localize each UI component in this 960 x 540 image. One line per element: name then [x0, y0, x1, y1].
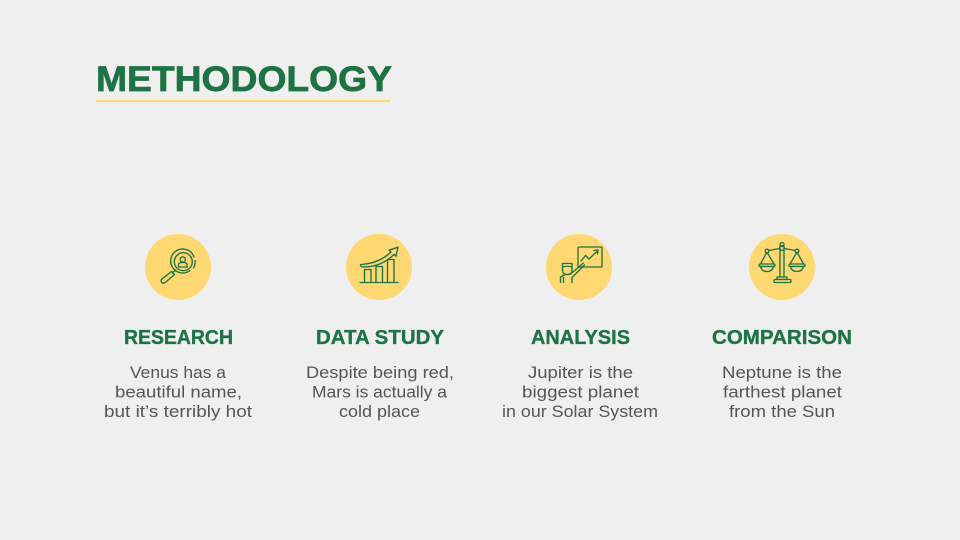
text: data study description: cold place — [339, 403, 420, 421]
panel: analysis — [502, 234, 658, 421]
text: data study description: Mars is actually a — [312, 384, 448, 402]
text: analysis description: in our Solar System — [502, 403, 658, 421]
text: research description: beautiful name, — [115, 384, 242, 402]
icon: magnifying glass with person — [145, 234, 211, 300]
panel: data study — [306, 234, 454, 421]
heading: analysis: ANALYSIS — [531, 327, 630, 349]
text: analysis description — [502, 364, 658, 421]
text: comparison description — [722, 364, 842, 421]
text: analysis description: biggest planet — [522, 384, 639, 402]
icon: presenter with chart — [546, 234, 612, 300]
text: comparison description: from the Sun — [729, 403, 835, 421]
text: comparison description: Neptune is the — [722, 364, 842, 382]
panel: comparison — [712, 234, 852, 421]
heading: comparison: COMPARISON — [712, 327, 852, 349]
icon: balance scales — [749, 234, 815, 300]
text: research description: but it’s terribly hot — [104, 403, 252, 421]
heading: research: RESEARCH — [124, 327, 233, 349]
text: comparison description: farthest planet — [723, 384, 842, 402]
icon: rising bar chart — [346, 234, 412, 300]
text: data study description: Despite being red, — [306, 364, 454, 382]
text: analysis description: Jupiter is the — [528, 364, 633, 382]
text: research description — [104, 364, 252, 421]
heading: data study: DATA STUDY — [316, 327, 445, 349]
text: research description: Venus has a — [130, 364, 227, 382]
text: data study description — [306, 364, 454, 421]
title: METHODOLOGY — [96, 60, 392, 99]
panel: research — [104, 234, 252, 421]
